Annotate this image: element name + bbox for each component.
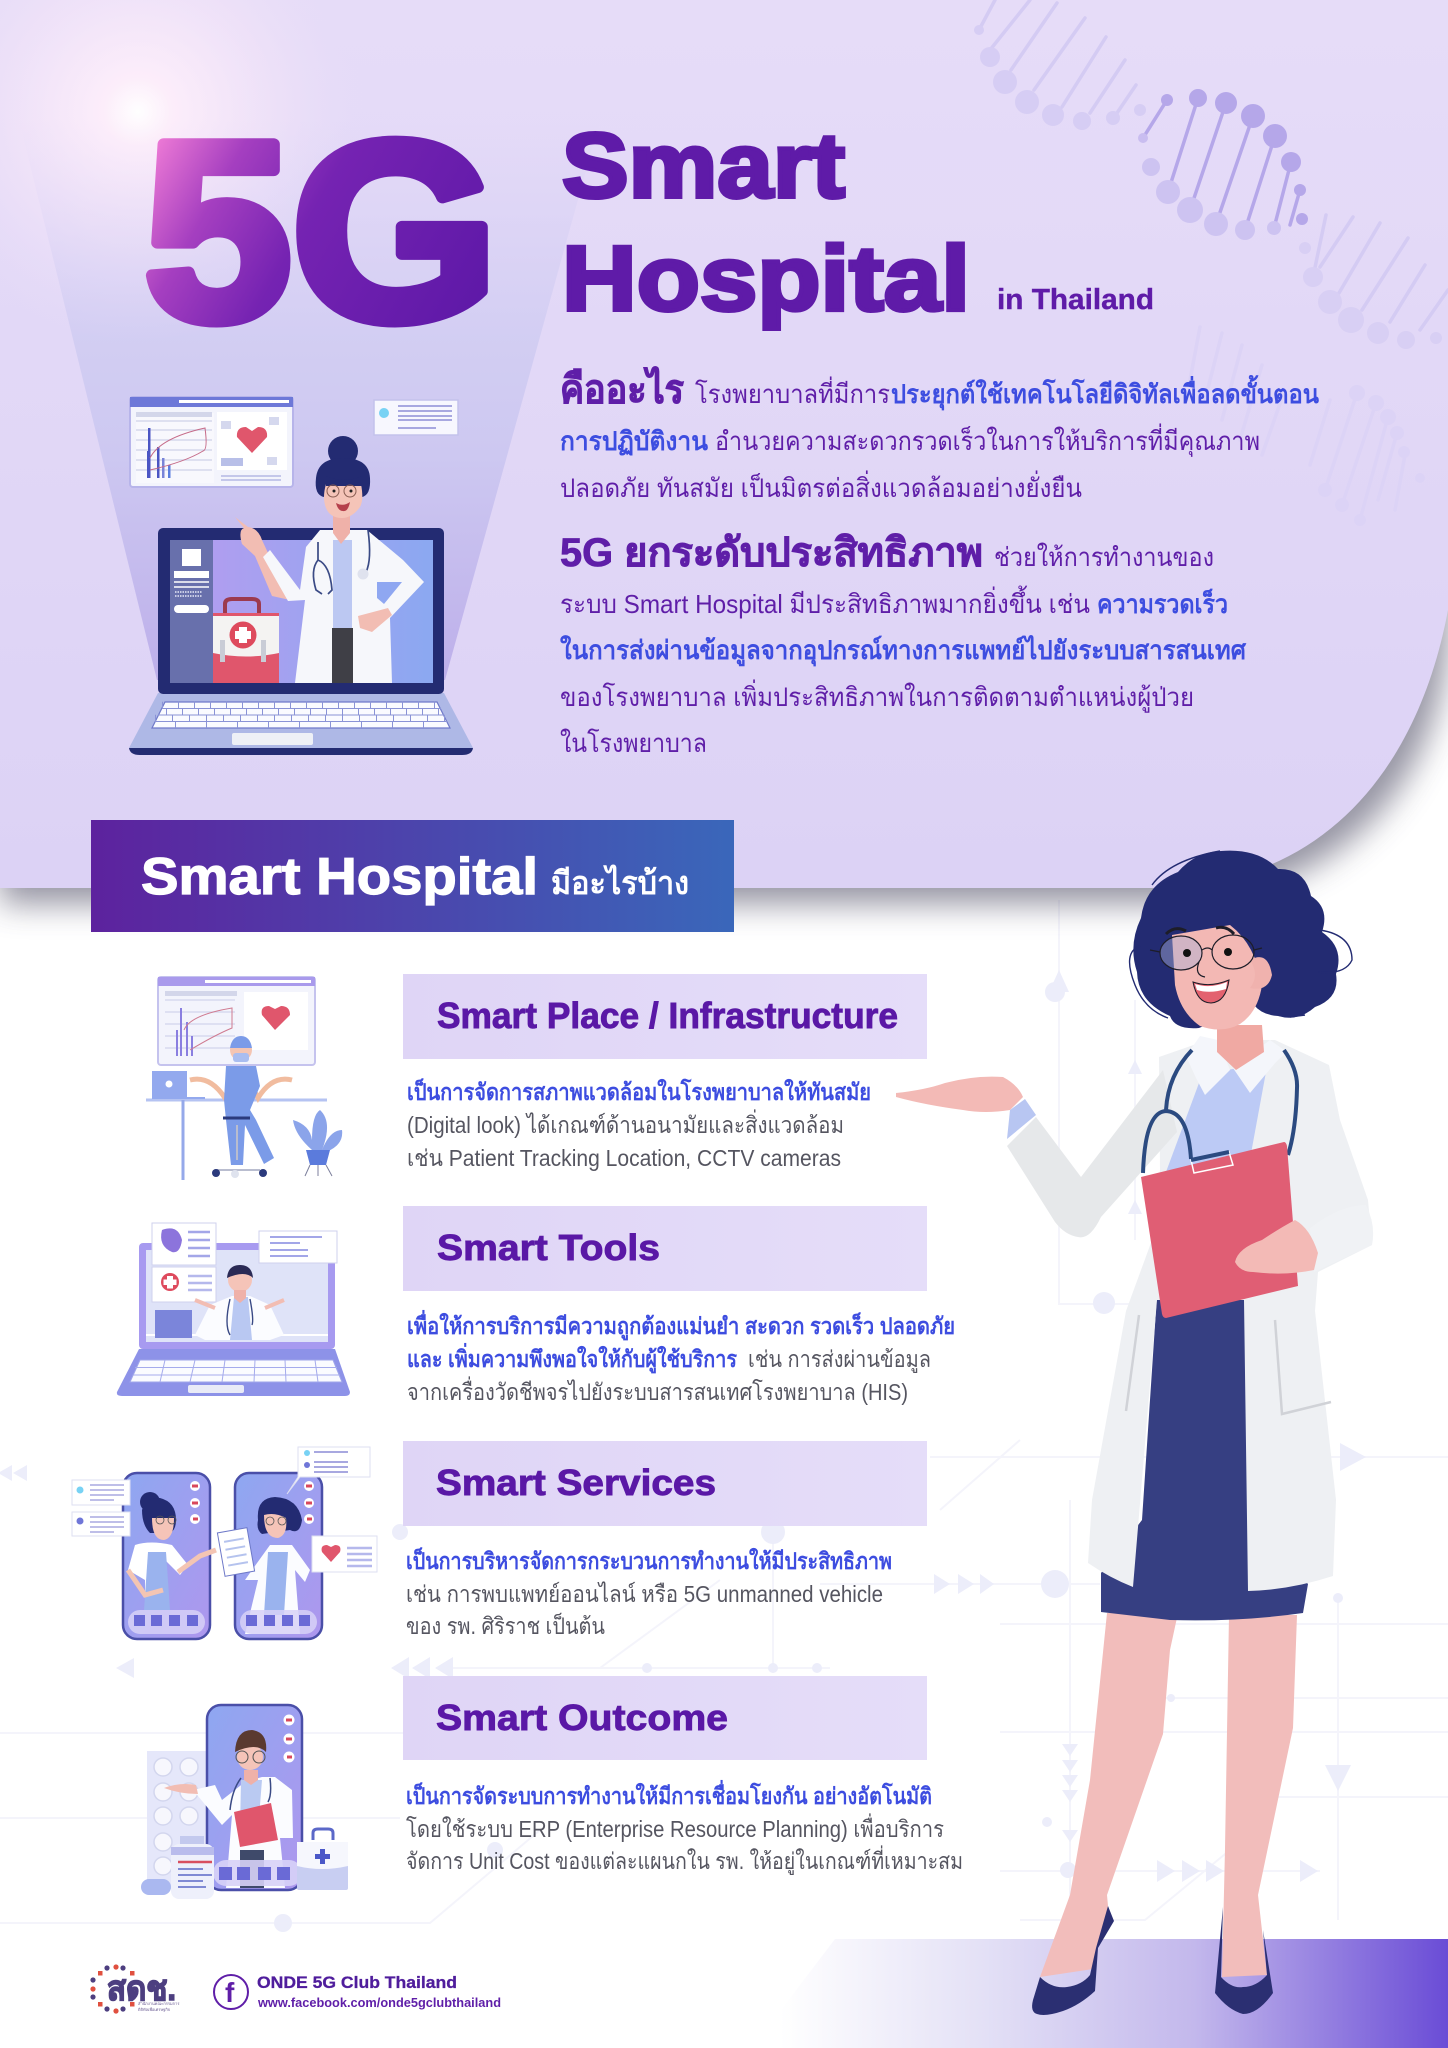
footer: facebook contact: f xyxy=(225,1977,235,2008)
top lavender panel xyxy=(0,0,1448,888)
clip bar xyxy=(1191,1152,1229,1160)
clip xyxy=(1191,1152,1233,1173)
icon: smart outcome illustration xyxy=(141,1705,348,1899)
icon: smart tools illustration xyxy=(117,1223,350,1396)
top panel shadow xyxy=(0,0,1448,904)
neck xyxy=(1217,1025,1264,1070)
dna helix decoration xyxy=(974,0,1448,526)
logo: sdch: สำนักงานคณะกรรมการ xyxy=(138,2001,180,2006)
stray hair lines xyxy=(1130,851,1352,1018)
text block: 5G raises efficiency: ระบบ Smart Hospital มีประสิทธิภาพมากยิ่งขึ้น เช่น xyxy=(560,585,1090,619)
teeth xyxy=(1195,982,1227,992)
panel: Smart Services: ของ รพ. ศิริราช เป็นต้น xyxy=(406,1611,605,1639)
title: Smart Hospital in Thailand xyxy=(562,115,1154,330)
hair back xyxy=(1133,851,1339,1028)
logo: sdch: ดิจิทัลเพื่อเศรษฐกิจ xyxy=(138,2007,170,2012)
panel: Smart Services: เป็นการบริหารจัดการกระบวนการทำงานให้มีประสิทธิภาพ xyxy=(406,1546,892,1574)
panel: Smart Tools: เช่น การส่งผ่านข้อมูล xyxy=(748,1346,931,1373)
left hand xyxy=(896,1077,1023,1112)
footer gradient band xyxy=(752,1939,1448,2048)
panel: Smart Services: เช่น การพบแพทย์ออนไลน์ หรือ 5G unmanned vehicle xyxy=(406,1581,883,1607)
text block: 5G raises efficiency: 5G ยกระดับประสิทธิภาพ xyxy=(560,531,983,575)
title: Smart Hospital in Thailand: Hospital xyxy=(562,228,970,330)
panel: Smart Outcome: Smart Outcome xyxy=(436,1697,728,1738)
text block: 5G raises efficiency: ในการส่งผ่านข้อมูลจากอุปกรณ์ทางการแพทย์ไปยังระบบสารสนเทศ xyxy=(560,634,1246,667)
panel: Smart Tools xyxy=(403,1206,955,1405)
logo: sdch xyxy=(90,1964,180,2014)
text block: what is smart hospital: อำนวยความสะดวกรวดเร็วในการให้บริการที่มีคุณภาพ xyxy=(715,423,1260,457)
text block: what is smart hospital: การปฏิบัติงาน xyxy=(560,426,708,456)
panel: Smart Services: Smart Services xyxy=(436,1462,716,1503)
panel: Smart Outcome: เป็นการจัดระบบการทำงานให้มีการเชื่อมโยงกัน อย่างอัตโนมัติ xyxy=(406,1779,932,1809)
panel: Smart Place / Infrastructure: เช่น Patient Tracking Location, CCTV cameras xyxy=(407,1145,841,1171)
text block: what is smart hospital xyxy=(560,366,1319,503)
face xyxy=(1172,925,1262,1030)
illustration: presenting doctor xyxy=(896,851,1373,2015)
panel: Smart Tools: Smart Tools xyxy=(437,1227,660,1268)
illustration: hero laptop with doctor xyxy=(129,397,473,755)
panel: Smart Services xyxy=(403,1441,927,1639)
text block: 5G raises efficiency: ช่วยให้การทำงานของ xyxy=(994,542,1214,572)
icon: smart place illustration xyxy=(146,977,342,1180)
panel: Smart Outcome: จัดการ Unit Cost ของแต่ละแผนกใน รพ. ให้อยู่ในเกณฑ์ที่เหมาะสม xyxy=(406,1845,963,1875)
left arm xyxy=(1007,1070,1177,1237)
panel: Smart Outcome: โดยใช้ระบบ ERP (Enterprise Resource Planning) เพื่อบริการ xyxy=(406,1813,944,1842)
lab coat pockets xyxy=(1126,1315,1331,1414)
footer: facebook contact: ONDE 5G Club Thailand xyxy=(257,1973,457,1992)
title: Smart Hospital in Thailand: in Thailand xyxy=(997,284,1154,316)
hair curl xyxy=(1250,957,1272,989)
collar xyxy=(1186,1036,1287,1095)
section banner: มีอะไรบ้าง xyxy=(551,864,689,901)
cuff xyxy=(1007,1099,1036,1139)
stethoscope xyxy=(1143,1050,1297,1173)
panel: Smart Tools: จากเครื่องวัดชีพจรไปยังระบบสารสนเทศโรงพยาบาล (HIS) xyxy=(407,1376,908,1405)
text block: what is smart hospital: ประยุกต์ใช้เทคโนโลยีดิจิทัลเพื่อลดขั้นตอน xyxy=(891,374,1319,411)
right hand xyxy=(1235,1220,1318,1274)
right sleeve xyxy=(1310,1205,1373,1272)
panel: Smart Outcome xyxy=(403,1676,963,1875)
ear xyxy=(1249,966,1267,984)
mouth xyxy=(1193,980,1229,1003)
text block: what is smart hospital: ปลอดภัย ทันสมัย เป็นมิตรต่อสิ่งแวดล้อมอย่างยั่งยืน xyxy=(560,470,1082,503)
clipboard xyxy=(1141,1142,1298,1318)
footer: facebook contact xyxy=(214,1973,501,2010)
panel: Smart Place / Infrastructure: (Digital look) ได้เกณฑ์ด้านอนามัยและสิ่งแวดล้อม xyxy=(407,1109,844,1138)
title: Smart Hospital in Thailand: Smart xyxy=(562,115,845,217)
text block: 5G raises efficiency: ของโรงพยาบาล เพิ่มประสิทธิภาพในการติดตามตำแหน่งผู้ป่วย xyxy=(560,679,1194,713)
lab coat xyxy=(1088,1040,1372,1591)
text block: 5G raises efficiency: ความรวดเร็ว xyxy=(1097,588,1228,619)
logo: sdch: สดช. xyxy=(107,1970,176,2008)
text block: what is smart hospital: คืออะไร xyxy=(560,366,684,412)
panel: Smart Place / Infrastructure xyxy=(403,974,927,1171)
shirt xyxy=(1166,1061,1268,1172)
section banner: Smart Hospital xyxy=(141,848,538,906)
medical bag xyxy=(213,599,279,683)
text block: what is smart hospital: โรงพยาบาลที่มีการ xyxy=(695,376,890,409)
panel: Smart Place / Infrastructure: Smart Place / Infrastructure xyxy=(437,995,898,1036)
background circuit pattern xyxy=(0,900,1448,1932)
footer: facebook contact: www.facebook.com/onde5gclubthailand xyxy=(257,1995,501,2010)
panel: Smart Tools: เพื่อให้การบริการมีความถูกต้องแม่นยำ สะดวก รวดเร็ว ปลอดภัย xyxy=(407,1309,955,1341)
title: 5G: 5G xyxy=(144,89,498,373)
glasses and eyes xyxy=(1150,927,1262,977)
skirt xyxy=(1101,1275,1308,1620)
panel: Smart Tools: และ เพิ่มความพึงพอใจให้กับผู้ใช้บริการ xyxy=(407,1342,738,1374)
panel: Smart Place / Infrastructure: เป็นการจัดการสภาพแวดล้อมในโรงพยาบาลให้ทันสมัย xyxy=(407,1077,871,1105)
section banner xyxy=(91,820,734,932)
doctor xyxy=(235,436,424,683)
laptop xyxy=(129,528,473,755)
text block: 5G raises efficiency: ในโรงพยาบาล xyxy=(560,728,707,758)
text block: 5G raises efficiency xyxy=(560,531,1246,758)
icon: smart services illustration xyxy=(72,1447,377,1639)
monitor card xyxy=(130,397,293,487)
info card xyxy=(374,400,458,435)
legs xyxy=(1040,1613,1297,1977)
shoes xyxy=(1032,1906,1273,2015)
